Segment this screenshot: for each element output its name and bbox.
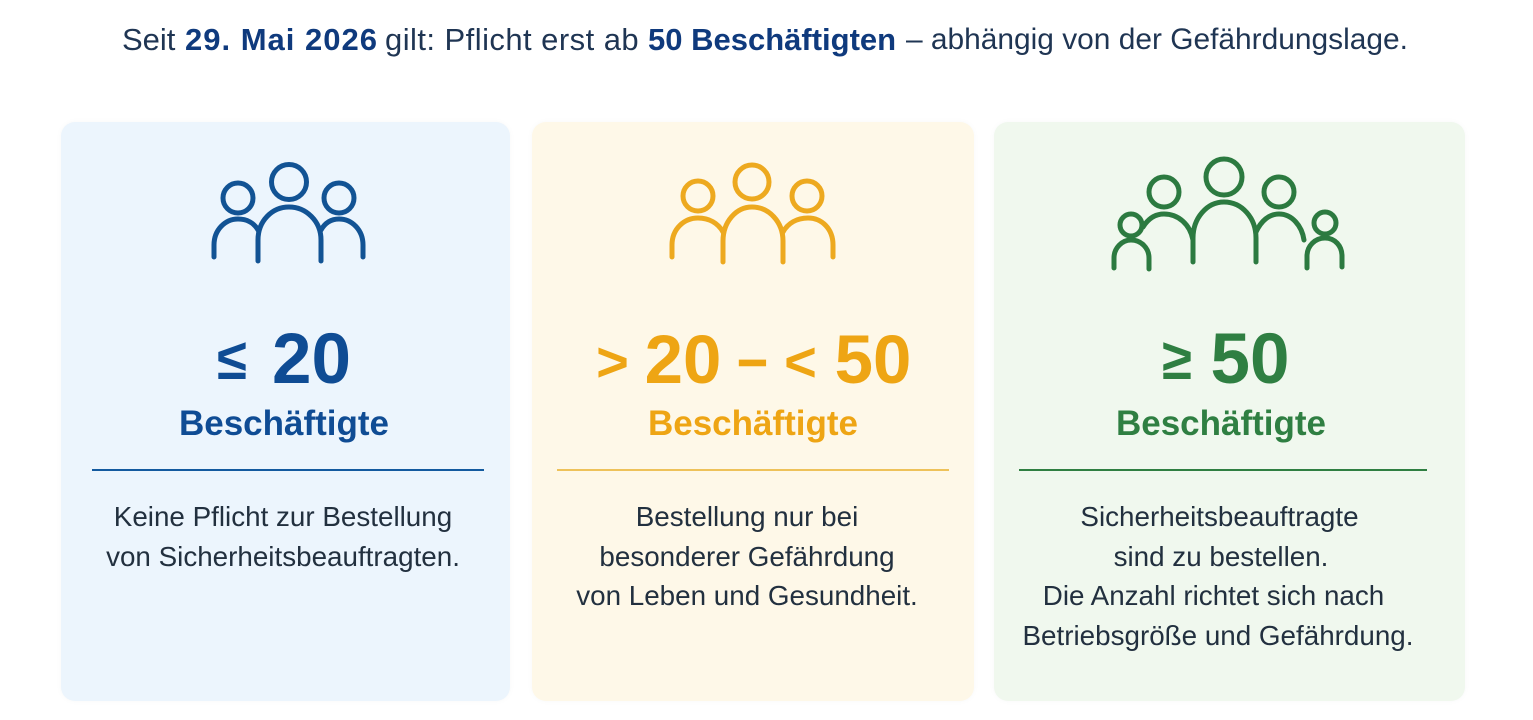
- label: Beschäftigte: [1116, 404, 1326, 443]
- panel: 50 or more employees: [994, 122, 1465, 701]
- big number: –: [738, 331, 767, 389]
- title: gilt: Pflicht erst ab: [385, 22, 639, 57]
- label: Beschäftigte: [179, 404, 389, 443]
- title: Seit: [122, 22, 175, 57]
- icon: three people amber: [670, 162, 836, 264]
- description: von Sicherheitsbeauftragten.: [106, 540, 460, 572]
- title: – abhängig von der Gefährdungslage.: [906, 23, 1408, 56]
- description: besonderer Gefährdung: [599, 540, 895, 572]
- big number: 50: [835, 321, 911, 398]
- label: Beschäftigte: [648, 404, 858, 443]
- big number: ≥: [1162, 327, 1192, 392]
- description: [576, 501, 918, 611]
- icon: three people blue: [212, 162, 366, 264]
- big number: >: [596, 330, 629, 393]
- big number: <: [784, 330, 817, 393]
- panel: up to 20 employees: [61, 122, 510, 701]
- description: Keine Pflicht zur Bestellung: [114, 501, 452, 532]
- description: von Leben und Gesundheit.: [576, 580, 918, 611]
- big number: [217, 320, 351, 399]
- title: [122, 22, 1408, 57]
- description: Betriebsgröße und Gefährdung.: [1023, 620, 1413, 650]
- big number: ≤: [217, 327, 247, 392]
- big number: [1162, 320, 1289, 399]
- title: 29. Mai 2026: [185, 22, 378, 57]
- description: [106, 501, 460, 572]
- description: sind zu bestellen.: [1114, 540, 1328, 572]
- description: Sicherheitsbeauftragte: [1080, 501, 1359, 532]
- description: Die Anzahl richtet sich nach: [1043, 580, 1384, 611]
- big number: 20: [272, 320, 351, 399]
- big number: 20: [645, 321, 721, 398]
- panel: 20 to 50 employees: [532, 122, 974, 701]
- big number: [596, 321, 911, 398]
- description: [1023, 501, 1413, 651]
- big number: 50: [1210, 320, 1289, 399]
- icon: five people green: [1112, 156, 1344, 272]
- description: Bestellung nur bei: [636, 501, 858, 532]
- title: 50 Beschäftigten: [648, 22, 896, 57]
